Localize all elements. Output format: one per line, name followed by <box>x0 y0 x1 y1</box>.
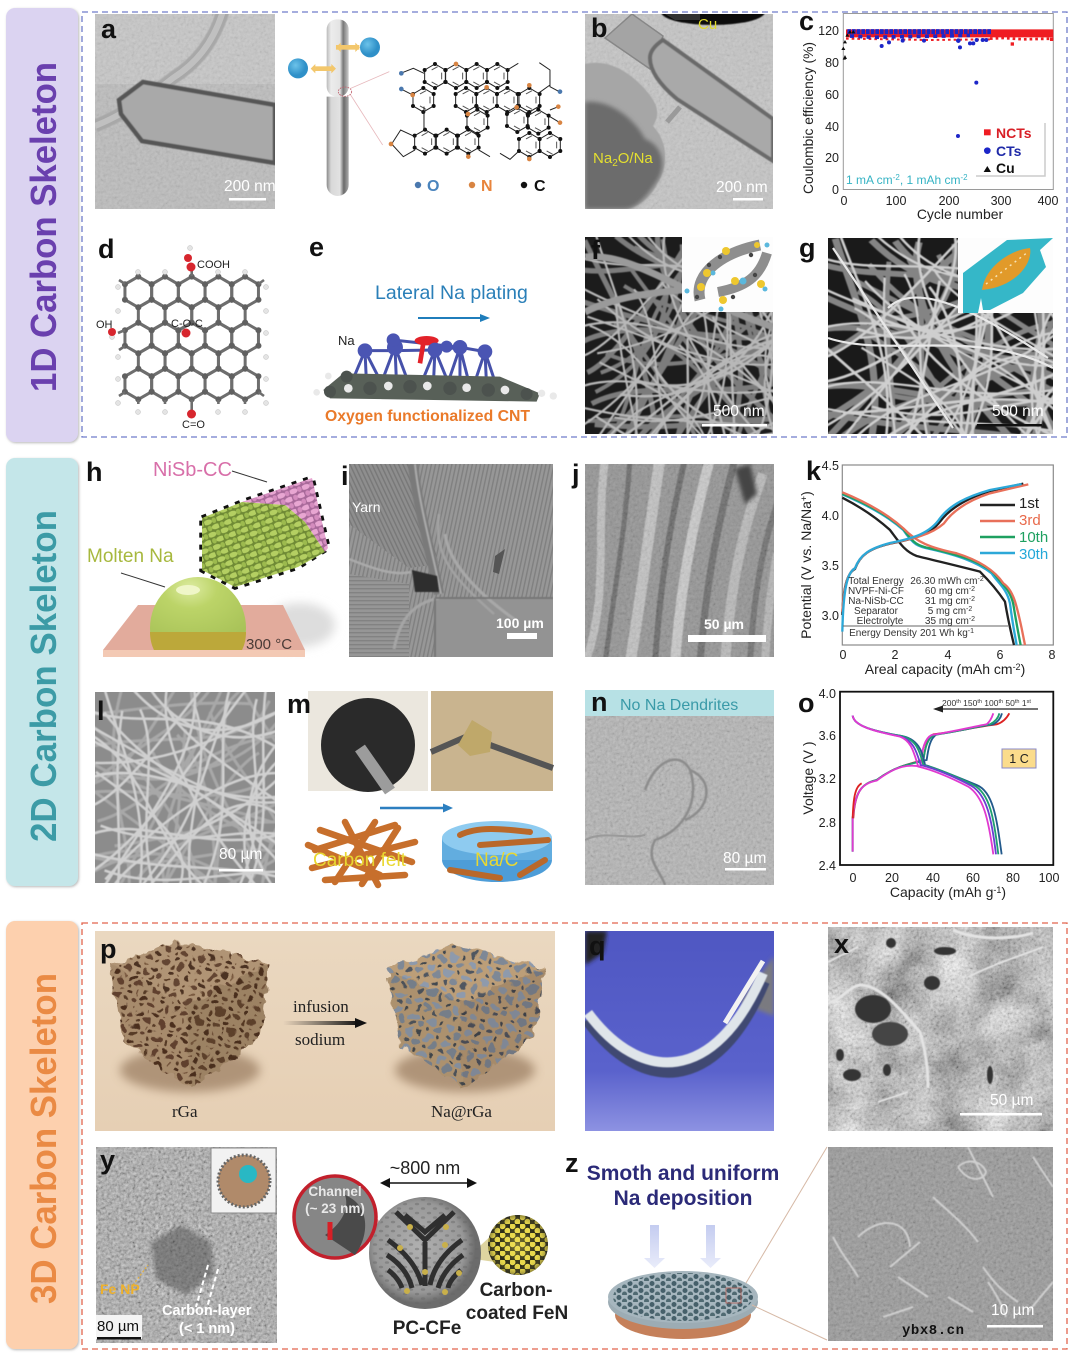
panel f: SEM image of CNT network with inset <box>585 237 773 434</box>
chart o: voltage vs capacity: th <box>977 699 982 705</box>
legend: O N C atoms: O <box>427 178 439 195</box>
panel n: SEM image, no Na dendrites <box>585 690 774 885</box>
chart o: voltage vs capacity: th <box>956 699 961 705</box>
panel p: infusion of sodium into rGa <box>95 931 555 1131</box>
diagram e: lateral Na plating on oxygen functionalized CNT: Oxygen functionalized CNT <box>325 408 530 425</box>
chart o: voltage vs capacity: 0 <box>850 871 857 885</box>
label y: y <box>100 1145 115 1175</box>
chart o: voltage vs capacity: 150 <box>961 698 978 708</box>
panel y: TEM image of Fe nanoparticle with inset: Carbon-layer <box>162 1303 252 1319</box>
label j: j <box>571 459 580 489</box>
chart o: voltage vs capacity: 200 <box>942 698 956 708</box>
chart o: voltage vs capacity: Capacity (mAh g <box>890 884 993 900</box>
chart k: potential vs areal capacity: -2 <box>1013 662 1021 672</box>
chart k: potential vs areal capacity: 3.0 <box>822 609 839 623</box>
panel b: TEM image with Cu and Na2O/Na: Cu <box>698 16 717 33</box>
panel i: SEM image of woven yarn: Yarn <box>352 499 381 515</box>
panel p: infusion of sodium into rGa: Na@rGa <box>431 1102 492 1121</box>
chart k: potential vs areal capacity: Areal capacity (mAh cm <box>865 661 1013 677</box>
panel x: SEM image at 50 um: 50 µm <box>990 1092 1033 1109</box>
chart k: potential vs areal capacity: 2 <box>892 648 899 662</box>
panel p: infusion of sodium into rGa: infusion <box>293 997 349 1016</box>
chart k: potential vs areal capacity: Electrolyte <box>857 616 904 627</box>
chart c: coulombic efficiency vs cycle number: 60 <box>825 88 839 102</box>
chart o: voltage vs capacity <box>800 687 1059 900</box>
chart k: potential vs areal capacity: Total Energy <box>848 576 904 587</box>
chart o: voltage vs capacity: 3.6 <box>819 729 836 743</box>
diagram z: smooth and uniform Na deposition <box>587 1147 827 1340</box>
panel j: SEM image of fibre bundle <box>585 464 774 657</box>
panel g: SEM image of fibers with inset <box>828 238 1053 434</box>
chart c: coulombic efficiency vs cycle number: 0 <box>841 194 848 208</box>
chart k: potential vs areal capacity: -2 <box>969 596 975 603</box>
panel y: TEM image of Fe nanoparticle with inset: 80 µm <box>97 1318 139 1335</box>
chart k: potential vs areal capacity: -2 <box>969 586 975 593</box>
chart k: potential vs areal capacity: 60 mg cm <box>925 586 969 597</box>
chart k: potential vs areal capacity: 5 mg cm <box>928 606 966 617</box>
panel b: TEM image with Cu and Na2O/Na: 2 <box>612 158 618 169</box>
chart o: voltage vs capacity: Voltage (V ) <box>800 741 816 815</box>
label d: d <box>98 234 114 264</box>
diagram e: lateral Na plating on oxygen functionalized CNT <box>313 282 557 425</box>
diagram h: molten Na on NiSb-CC <box>87 459 335 657</box>
panel n: SEM image, no Na dendrites: 80 µm <box>723 850 766 867</box>
chart c: coulombic efficiency vs cycle number: Coulombic efficiency (%) <box>800 42 816 194</box>
chart k: potential vs areal capacity: 8 <box>1049 648 1056 662</box>
watermark: ybx8.cn <box>902 1323 964 1339</box>
chart k: potential vs areal capacity: 26.30 mWh cm <box>910 576 978 587</box>
chart o: voltage vs capacity: 100 <box>982 698 999 708</box>
chart o: voltage vs capacity: 1 <box>1019 698 1027 708</box>
diagram: PC-CFe porous carbon sphere: ~800 nm <box>390 1158 460 1178</box>
chart o: voltage vs capacity: st <box>1027 699 1031 705</box>
chart k: potential vs areal capacity: -1 <box>968 628 974 635</box>
label b: b <box>591 13 608 43</box>
panel x: SEM image at 50 um <box>828 927 1053 1131</box>
diagram d: functionalized graphene: OH <box>96 319 113 331</box>
chart o: voltage vs capacity: 20 <box>885 871 899 885</box>
panel y: TEM image of Fe nanoparticle with inset <box>96 1147 277 1343</box>
diagram: PC-CFe porous carbon sphere: PC-CFe <box>393 1318 461 1339</box>
chart k: potential vs areal capacity: Energy Density <box>849 628 917 639</box>
chart o: voltage vs capacity: 2.4 <box>819 859 836 873</box>
panel j: SEM image of fibre bundle: 50 µm <box>704 616 744 632</box>
label i: i <box>341 461 349 491</box>
diagram h: molten Na on NiSb-CC: NiSb-CC <box>153 459 232 481</box>
chart k: potential vs areal capacity: 4.5 <box>822 459 839 473</box>
panel b: TEM image with Cu and Na2O/Na: Na <box>593 150 612 167</box>
diagram e: lateral Na plating on oxygen functionalized CNT: Lateral Na plating <box>375 282 528 304</box>
chart k: potential vs areal capacity: 31 mg cm <box>925 596 969 607</box>
diagram d: functionalized graphene <box>96 246 268 431</box>
chart k: potential vs areal capacity: 6 <box>997 648 1004 662</box>
chart o: voltage vs capacity: th <box>1015 699 1019 705</box>
chart k: potential vs areal capacity: -2 <box>966 606 972 613</box>
panel i: SEM image of woven yarn: 100 µm <box>496 615 544 631</box>
chart k: potential vs areal capacity: 1st <box>1019 495 1040 512</box>
chart k: potential vs areal capacity: Potential (V vs. Na/Na <box>798 501 814 639</box>
chart o: voltage vs capacity: 4.0 <box>819 687 836 701</box>
chart o: voltage vs capacity: 60 <box>966 871 980 885</box>
diagram: PC-CFe porous carbon sphere: coated FeN <box>466 1303 568 1324</box>
chart c: coulombic efficiency vs cycle number: 40 <box>825 120 839 134</box>
label l: l <box>97 696 105 726</box>
panel: 1D carbon skeleton tab: 1D Carbon Skeleton <box>23 62 64 392</box>
chart k: potential vs areal capacity: 3.5 <box>822 559 839 573</box>
chart c: coulombic efficiency vs cycle number: 0 <box>832 183 839 197</box>
diagram h: molten Na on NiSb-CC: Molten Na <box>87 546 174 567</box>
chart k: potential vs areal capacity: 30th <box>1019 546 1048 563</box>
chart c: coulombic efficiency vs cycle number: Cu <box>996 160 1015 176</box>
chart k: potential vs areal capacity: -2 <box>969 616 975 623</box>
panel m: carbon felt photos and Na/C illustration: Carbon felt <box>313 850 407 871</box>
chart k: potential vs areal capacity: ) <box>798 491 814 496</box>
label k: k <box>806 456 822 486</box>
panel: 3D carbon skeleton tab <box>6 921 78 1349</box>
chart o: voltage vs capacity: 40 <box>926 871 940 885</box>
chart o: voltage vs capacity: 80 <box>1006 871 1020 885</box>
panel m: carbon felt photos and Na/C illustration <box>308 691 553 885</box>
chart c: coulombic efficiency vs cycle number: 300 <box>991 194 1011 208</box>
chart k: potential vs areal capacity <box>798 459 1056 677</box>
chart c: coulombic efficiency vs cycle number <box>800 14 1058 222</box>
chart c: coulombic efficiency vs cycle number: 80 <box>825 56 839 70</box>
panel p: infusion of sodium into rGa: rGa <box>172 1102 198 1121</box>
panel m: carbon felt photos and Na/C illustration: Na/C <box>475 850 518 871</box>
panel l: SEM image of carbon fibers <box>95 692 275 883</box>
panel a: TEM image of carbon tube: 200 nm <box>224 178 276 195</box>
chart k: potential vs areal capacity: NVPF-Ni-CF <box>848 586 904 597</box>
chart k: potential vs areal capacity: -2 <box>978 576 984 583</box>
panel b: TEM image with Cu and Na2O/Na <box>585 14 773 209</box>
panel: SEM image at 10 um: 10 µm <box>991 1302 1034 1319</box>
legend: O N C atoms <box>415 178 546 195</box>
panel b: TEM image with Cu and Na2O/Na: 200 nm <box>716 179 768 196</box>
label p: p <box>100 934 116 964</box>
label m: m <box>287 689 311 719</box>
diagram d: functionalized graphene: C=O <box>182 419 205 431</box>
chart k: potential vs areal capacity: 4 <box>945 648 952 662</box>
chart o: voltage vs capacity: 1 C <box>1009 752 1029 766</box>
diagram: PC-CFe porous carbon sphere: (~ 23 nm) <box>305 1201 365 1216</box>
chart o: voltage vs capacity: -1 <box>993 885 1001 895</box>
panel a: TEM image of carbon tube <box>95 14 276 209</box>
chart k: potential vs areal capacity: 35 mg cm <box>925 616 969 627</box>
chart c: coulombic efficiency vs cycle number: CTs <box>996 143 1022 159</box>
chart k: potential vs areal capacity: Na-NiSb-CC <box>848 596 904 607</box>
chart o: voltage vs capacity: 3.2 <box>819 772 836 786</box>
panel l: SEM image of carbon fibers: 80 µm <box>219 846 262 863</box>
panel: 3D carbon skeleton tab: 3D Carbon Skeleton <box>23 973 64 1304</box>
chart o: voltage vs capacity: 100 <box>1039 871 1059 885</box>
legend: O N C atoms: N <box>481 178 493 195</box>
diagram e: lateral Na plating on oxygen functionalized CNT: Na <box>338 333 355 348</box>
diagram d: functionalized graphene: COOH <box>197 259 230 271</box>
label e: e <box>309 232 324 262</box>
chart o: voltage vs capacity: ) <box>1001 884 1006 900</box>
legend: O N C atoms: C <box>534 178 546 195</box>
chart k: potential vs areal capacity: ) <box>1021 661 1025 677</box>
chart k: potential vs areal capacity: 0 <box>840 648 847 662</box>
label g: g <box>799 233 816 263</box>
label z: z <box>565 1148 578 1178</box>
panel g: SEM image of fibers with inset: 500 nm <box>992 403 1044 420</box>
panel f: SEM image of CNT network with inset: 500 nm <box>713 403 765 420</box>
label x: x <box>834 929 849 959</box>
diagram d: functionalized graphene: C-O-C <box>171 318 203 330</box>
label q: q <box>589 931 606 961</box>
chart o: voltage vs capacity: 2.8 <box>819 816 836 830</box>
panel q: flexible electrode photo <box>585 931 774 1131</box>
panel b: TEM image with Cu and Na2O/Na: O/Na <box>618 150 653 167</box>
diagram h: molten Na on NiSb-CC: 300 °C <box>246 636 292 653</box>
panel: 2D carbon skeleton tab: 2D Carbon Skeleton <box>23 510 64 842</box>
panel: 2D carbon skeleton tab <box>6 458 78 886</box>
diagram: PC-CFe porous carbon sphere: Channel <box>308 1184 362 1199</box>
label h: h <box>86 457 102 487</box>
chart c: coulombic efficiency vs cycle number: 200 <box>939 194 959 208</box>
chart k: potential vs areal capacity: 3rd <box>1019 512 1041 529</box>
chart c: coulombic efficiency vs cycle number: -2 <box>893 173 900 182</box>
panel n: SEM image, no Na dendrites: No Na Dendrites <box>620 697 738 714</box>
chart o: voltage vs capacity: 50 <box>1003 698 1015 708</box>
chart c: coulombic efficiency vs cycle number: 120 <box>818 24 839 38</box>
diagram: PC-CFe porous carbon sphere: Carbon- <box>480 1280 552 1301</box>
chart c: coulombic efficiency vs cycle number: 20 <box>825 151 839 165</box>
panel y: TEM image of Fe nanoparticle with inset: Fe NP <box>100 1281 140 1297</box>
panel p: infusion of sodium into rGa: sodium <box>295 1030 345 1049</box>
chart k: potential vs areal capacity: 10th <box>1019 529 1048 546</box>
label f: f <box>591 235 601 265</box>
chart c: coulombic efficiency vs cycle number: , 1 mAh cm <box>900 173 960 187</box>
diagram: PC-CFe porous carbon sphere <box>294 1158 568 1339</box>
panel: SEM image at 10 um <box>828 1147 1053 1341</box>
chart c: coulombic efficiency vs cycle number: -2 <box>960 173 968 182</box>
panel i: SEM image of woven yarn <box>349 464 553 657</box>
panel y: TEM image of Fe nanoparticle with inset: (< 1 nm) <box>179 1321 235 1337</box>
chart c: coulombic efficiency vs cycle number: 1 mA cm <box>846 173 893 187</box>
label a: a <box>101 14 117 44</box>
label c: c <box>799 6 814 36</box>
label o: o <box>798 688 814 718</box>
diagram z: smooth and uniform Na deposition: Smoth and uniform <box>587 1162 779 1185</box>
chart k: potential vs areal capacity: 4.0 <box>822 509 839 523</box>
label n: n <box>591 687 608 717</box>
chart k: potential vs areal capacity: 201 Wh kg <box>920 628 968 639</box>
chart c: coulombic efficiency vs cycle number: 100 <box>886 194 906 208</box>
chart o: voltage vs capacity: th <box>998 699 1003 705</box>
chart c: coulombic efficiency vs cycle number: NCTs <box>996 125 1032 141</box>
chart c: coulombic efficiency vs cycle number: 400 <box>1038 194 1058 208</box>
diagram: carbon tube and molecular structure <box>288 19 562 196</box>
chart k: potential vs areal capacity: Separator <box>854 606 899 617</box>
chart c: coulombic efficiency vs cycle number: Cycle number <box>917 206 1004 222</box>
chart k: potential vs areal capacity: + <box>799 496 809 501</box>
panel: 1D carbon skeleton tab <box>6 8 78 442</box>
diagram z: smooth and uniform Na deposition: Na deposition <box>614 1187 752 1210</box>
